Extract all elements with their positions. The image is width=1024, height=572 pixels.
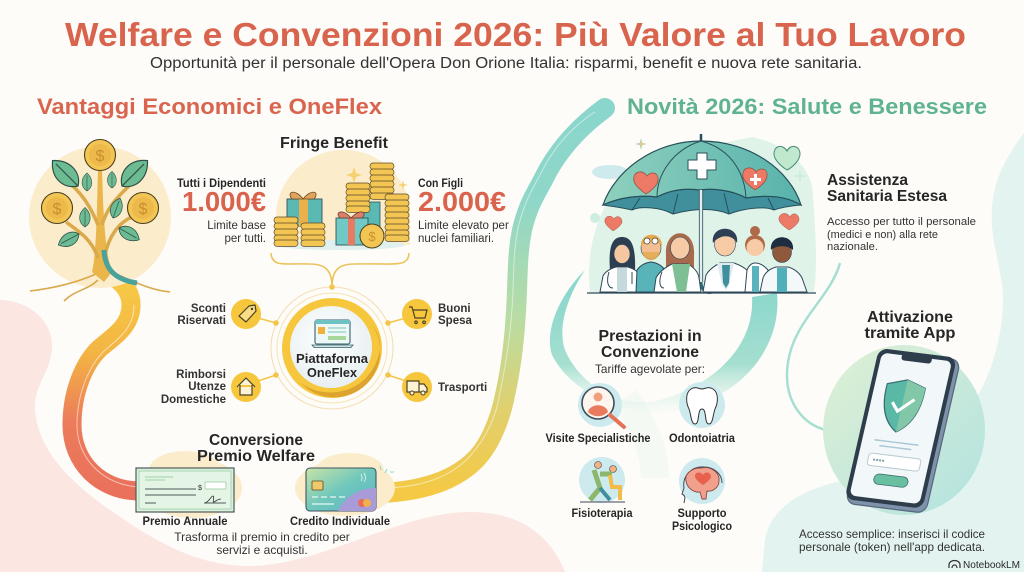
heading: conversione premio welfare xyxy=(197,432,315,465)
item: buoni spesa: Buoni xyxy=(438,303,471,315)
heading: fringe benefit: Fringe Benefit xyxy=(280,135,388,152)
illustration: umbrella with doctors xyxy=(587,134,816,293)
background blob: pink xyxy=(0,300,565,572)
notebooklm logo: NotebookLM xyxy=(963,559,1020,571)
block: tutti i dipendenti xyxy=(177,178,266,245)
icon: laptop xyxy=(312,320,353,348)
block: tutti i dipendenti: Tutti i Dipendenti xyxy=(177,178,266,190)
heading: prestazioni xyxy=(598,328,702,361)
item: trasporti: Trasporti xyxy=(438,382,487,394)
item: buoni spesa: Spesa xyxy=(438,315,472,327)
block: tutti i dipendenti: 1.000€ xyxy=(182,186,266,217)
text: trasforma: Trasforma il premio in credito per xyxy=(174,530,350,544)
title: Welfare e Convenzioni 2026: Più Valore al Tuo Lavoro xyxy=(65,16,966,53)
ribbon: thin teal line xyxy=(787,263,840,430)
item: sconti riservati: Sconti xyxy=(191,303,226,315)
service: fisioterapia: Fisioterapia xyxy=(572,508,633,520)
doctor 2 xyxy=(636,235,665,292)
sparkles xyxy=(636,139,805,181)
icon: money tree: $ xyxy=(53,201,62,218)
ribbon: faded diagonal xyxy=(625,398,655,478)
hearts xyxy=(605,213,799,231)
heading: conversione premio welfare: Premio Welfare xyxy=(197,448,315,465)
item: rimborsi utenze: Domestiche xyxy=(161,394,226,406)
ground line xyxy=(587,292,816,294)
icon: phone with shield xyxy=(823,345,985,515)
heading: attivazione xyxy=(864,309,956,342)
blobs behind conversion icons xyxy=(142,451,395,518)
ribbon highlight: left xyxy=(77,305,138,487)
doctor 1 xyxy=(600,237,643,292)
text: accesso semplice: Accesso semplice: inserisci il codice xyxy=(799,527,985,541)
block: con figli xyxy=(418,178,509,245)
block: tutti i dipendenti: per tutti. xyxy=(224,233,266,245)
block: con figli: nuclei familiari. xyxy=(418,233,494,245)
ribbon: yellow to red from tree to cheque xyxy=(72,272,140,491)
doctor 3 xyxy=(654,233,701,292)
service: fisioterapia xyxy=(572,457,633,520)
text: trasforma xyxy=(174,530,350,557)
block: con figli: 2.000€ xyxy=(418,186,506,217)
heading: assistenza sanitaria: Sanitaria Estesa xyxy=(827,188,947,205)
service: supporto psicologico xyxy=(672,458,732,533)
item: rimborsi utenze: Rimborsi xyxy=(176,369,226,381)
hub: piattaforma oneflex: Piattaforma xyxy=(296,351,369,366)
heading: attivazione: Attivazione xyxy=(867,309,953,326)
subtitle: Opportunità per il personale dell'Opera Don Orione Italia: risparmi, benefit e nuova rete sanitaria. xyxy=(150,55,862,72)
icon: money tree: $ xyxy=(139,201,148,218)
text: tariffe: Tariffe agevolate per: xyxy=(595,362,705,376)
heading: prestazioni: Convenzione xyxy=(601,344,699,361)
heading: assistenza sanitaria xyxy=(827,172,947,205)
ribbon: teal arc around services xyxy=(550,270,777,413)
heading: attivazione: tramite App xyxy=(864,325,956,342)
text: trasforma: servizi e acquisti. xyxy=(216,543,308,557)
heading: prestazioni: Prestazioni in xyxy=(598,328,702,345)
doctor 4 xyxy=(703,229,754,292)
service: visite specialistiche xyxy=(546,383,650,445)
icon: heart monitor xyxy=(774,146,800,170)
connectors to hub xyxy=(258,318,406,381)
ribbon: yellow to teal from card to section heading xyxy=(372,108,605,493)
background blob: teal xyxy=(762,133,1024,572)
icon: cheque xyxy=(136,468,234,512)
doctor 5 xyxy=(745,226,768,292)
hub: piattaforma oneflex xyxy=(271,287,393,409)
heading: assistenza sanitaria: Assistenza xyxy=(827,172,908,189)
icon: money tree xyxy=(29,140,171,301)
heading: right section: Novità 2026: Salute e Benessere xyxy=(627,94,987,119)
item: trasporti xyxy=(402,372,487,402)
bracket connector xyxy=(271,253,409,287)
connector dots xyxy=(273,284,391,378)
icon: money tree: $ xyxy=(96,148,105,165)
service: visite specialistiche: Visite Specialistiche xyxy=(546,433,650,445)
labels: premio and credito: Premio Annuale xyxy=(142,516,228,528)
block: con figli: Con Figli xyxy=(418,178,463,190)
icon: credit card xyxy=(306,466,394,511)
item: rimborsi utenze xyxy=(161,369,261,406)
text: accesso: nazionale. xyxy=(827,241,878,253)
heading: conversione premio welfare: Conversione xyxy=(209,432,303,449)
labels: premio and credito xyxy=(142,516,390,528)
text: accesso: Accesso per tutto il personale xyxy=(827,216,976,228)
text: accesso xyxy=(827,216,976,253)
item: buoni spesa xyxy=(402,299,472,329)
umbrella canopy xyxy=(603,134,801,292)
block: tutti i dipendenti: Limite base xyxy=(207,220,266,232)
item: sconti riservati xyxy=(177,299,261,329)
hub: piattaforma oneflex: OneFlex xyxy=(307,365,358,380)
icon: gifts and coins: $ xyxy=(368,229,376,244)
labels: premio and credito: Credito Individuale xyxy=(290,516,390,528)
text: accesso semplice: personale (token) nell'app dedicata. xyxy=(799,540,985,554)
heading: left section: Vantaggi Economici e OneFlex xyxy=(37,94,383,119)
icon: cheque: $ xyxy=(198,485,202,492)
item: rimborsi utenze: Utenze xyxy=(188,381,226,393)
service: odontoiatria: Odontoiatria xyxy=(669,433,736,445)
text: accesso: (medici e non) alla rete xyxy=(827,229,938,241)
icon: gifts and coins xyxy=(274,150,410,250)
service: odontoiatria xyxy=(669,382,736,445)
item: sconti riservati: Riservati xyxy=(177,315,226,327)
service: supporto psicologico: Psicologico xyxy=(672,521,732,533)
doctor 6 xyxy=(760,237,807,292)
text: accesso semplice xyxy=(799,527,985,554)
service: supporto psicologico: Supporto xyxy=(678,508,726,520)
ribbon highlight: right xyxy=(380,112,595,488)
block: con figli: Limite elevato per xyxy=(418,220,509,232)
